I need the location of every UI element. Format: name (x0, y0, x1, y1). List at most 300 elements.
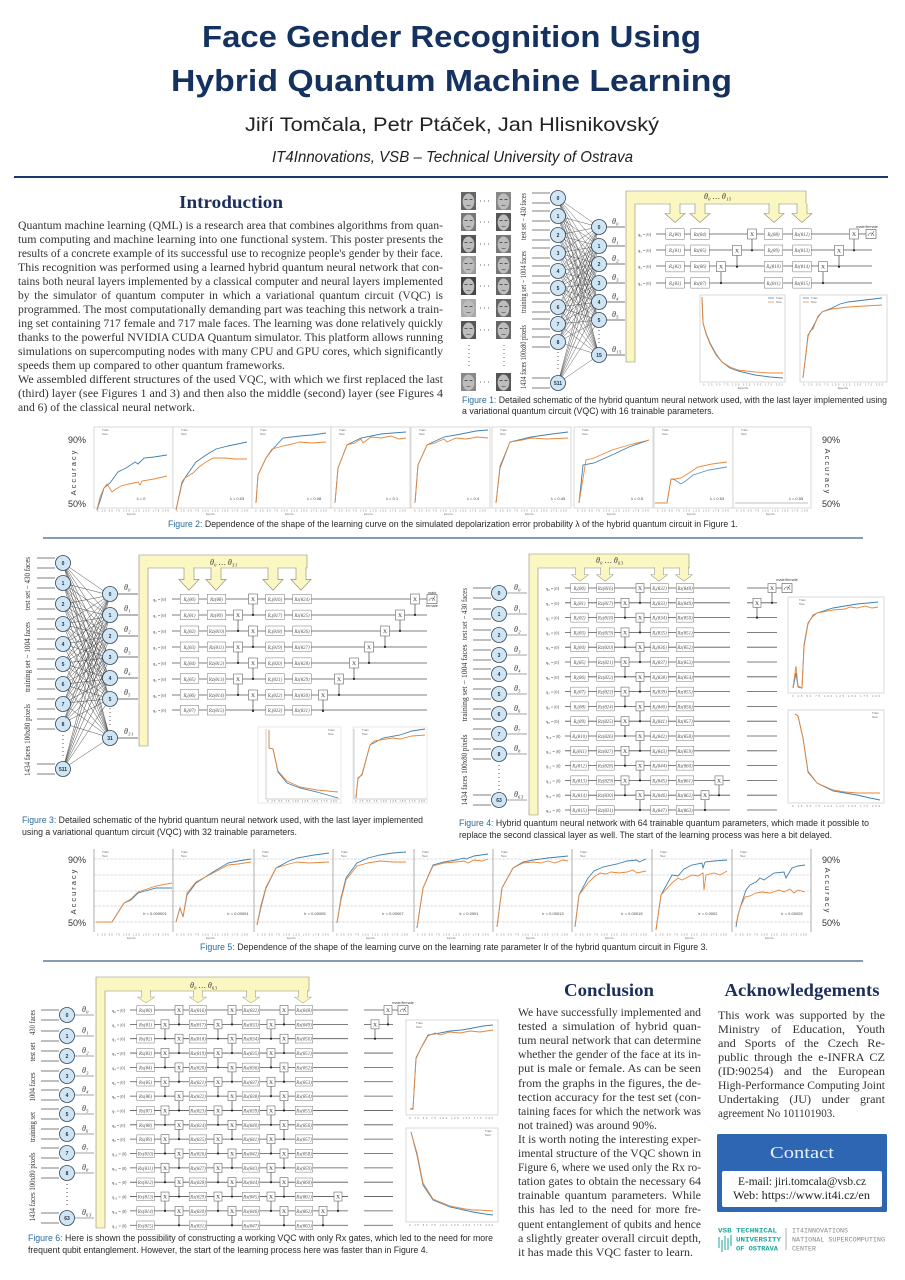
dataset labels: test set − 430 faces (23, 557, 32, 610)
neural layer: θ₄ (82, 1085, 89, 1094)
quantum circuit: Rx(θ5) (138, 1081, 152, 1086)
dataset labels: 1434 faces 100x80 pixels (519, 325, 528, 389)
quantum circuit: Rx(θ43) (242, 1167, 259, 1172)
neural network: 3 (109, 655, 112, 661)
quantum circuit: Rx(θ1) (138, 1023, 152, 1028)
logo: VSB (718, 1228, 782, 1254)
quantum circuit: Rz(θ50) (676, 617, 693, 622)
quantum circuit: Rᵧ(θ34) (651, 617, 667, 622)
quantum circuit: Rz(θ6) (693, 265, 707, 270)
neural network: θ₁ (612, 236, 619, 245)
quantum circuit: Rx(θ49) (295, 1023, 312, 1028)
quantum circuit: Rᵧ(θ6) (182, 694, 196, 699)
text block: conclusion: from the graphs in the figures, the de- (518, 1076, 701, 1090)
chart: lambda 0.08: Train (260, 428, 267, 432)
chart: lr 0.00001: 0 25 50 75 100 125 150 175 200 (176, 932, 249, 936)
chart: lambda 0.55 (733, 427, 811, 516)
panel: introduction (18, 192, 444, 414)
quantum circuit: q₁₂ = |0⟩ (546, 764, 561, 769)
quantum circuit: Rz(θ30) (597, 794, 613, 799)
chart: lambda 0: Train (102, 428, 109, 432)
heading: acknowledgements: Acknowledgements (724, 980, 880, 1000)
quantum circuit: Rz(θ25) (597, 720, 613, 725)
quantum circuit: Rx(θ29) (189, 1196, 206, 1201)
quantum circuit: XXXXXXXXXXXXXXXXXXXXX (163, 1022, 273, 1201)
authors: Jiří Tomčala, Petr Ptáček, Jan Hlisnikovský (245, 114, 659, 136)
neural layer: θ₅ (514, 684, 521, 693)
quantum circuit: Rx(θ25) (189, 1138, 206, 1143)
quantum circuit: Rx(θ12) (137, 1181, 154, 1186)
affiliation: IT4Innovations, VSB – Technical University of Ostrava (272, 149, 633, 166)
text block: acknowledgements: (ID:90254) and the European (718, 1064, 885, 1078)
quantum circuit: Rx(θ9) (138, 1138, 152, 1143)
neural layer: 7 (66, 1151, 69, 1157)
neural network: θ₂ (124, 625, 131, 634)
chart: lambda 0: 0 25 50 75 100 125 150 175 200 (97, 508, 170, 512)
quantum circuit: Rx(θ24) (189, 1124, 206, 1129)
quantum circuit: q₇ = |0⟩ (546, 690, 559, 695)
chart: lambda 0.08: Epochs (285, 512, 294, 516)
neural layer: θ₈ (514, 744, 521, 753)
quantum circuit: q₁₅ = |0⟩ (546, 808, 561, 813)
quantum circuit: Rx(θ47) (242, 1224, 259, 1229)
axis labels left (68, 855, 86, 928)
text block: conclusion: tested a simulation of hybrid quan- (518, 1019, 701, 1033)
neural network: 5 (557, 286, 560, 292)
chart: lambda 0.5: Epochs (607, 512, 616, 516)
quantum circuit: Rᵧ(θ4) (572, 646, 586, 651)
quantum circuit: Rᵧ(θ45) (651, 779, 667, 784)
quantum circuit: Rᵧ(θ22) (267, 694, 283, 699)
quantum circuit: Rz(θ14) (793, 265, 810, 270)
quantum circuit: q₈ = |0⟩ (112, 1123, 125, 1128)
text block: acknowledgements: public through the e-INFRA CZ (718, 1050, 885, 1064)
quantum circuit: Rz(θ54) (676, 676, 693, 681)
chart: lr 0.0002: Test (660, 854, 666, 858)
text block: conclusion: a slightly greater overall circuit depth, (518, 1231, 701, 1245)
quantum circuit: q₃ = |0⟩ (153, 645, 166, 650)
neural layer: 6 (498, 712, 501, 718)
chart: lr 0.00007: lr = 0.00007 (382, 911, 404, 916)
neural network: θ₂ (612, 254, 619, 263)
neural layer: θ₅ (82, 1104, 89, 1113)
neural layer: 5 (498, 692, 501, 698)
quantum circuit: Rz(θ15) (208, 709, 224, 714)
chart: lr 0.00015: Train (580, 850, 587, 854)
quantum circuit: male (428, 590, 437, 595)
quantum circuit: Rz(θ20) (597, 646, 613, 651)
quantum circuit: Rz(θ49) (676, 602, 693, 607)
quantum circuit: Rᵧ(θ23) (267, 709, 283, 714)
neural layer: 8 (66, 1171, 69, 1177)
title: Hybrid Quantum Machine Learning (171, 63, 732, 98)
text block: introduction: Quantum machine learning (QML) is a research area that combines algorithms from quan- (18, 218, 443, 232)
chart: lr 0.00025: lr = 0.00025 (781, 911, 803, 916)
quantum circuit: Rᵧ(θ41) (651, 720, 667, 725)
text block: conclusion: quent entanglement of qubits and hence (518, 1217, 701, 1231)
quantum circuit: Rᵧ(θ42) (651, 735, 667, 740)
quantum circuit: q₁₁ = |0⟩ (112, 1166, 127, 1171)
quantum circuit: Rᵧ(θ10) (571, 735, 587, 740)
quantum circuit: Rᵧ(θ19) (267, 646, 283, 651)
neural network: 4 (109, 676, 112, 682)
axis labels right: 90% (822, 435, 840, 445)
quantum circuit: Rᵧ(θ38) (651, 676, 667, 681)
quantum circuit: Rᵧ(θ7) (182, 709, 196, 714)
neural layer: θ₃ (82, 1066, 89, 1075)
text block: acknowledgements: Undertaking (JU) under grant (718, 1092, 886, 1106)
chart: lambda 0.55: Epochs (766, 512, 775, 516)
quantum circuit: Rx(θ63) (295, 1224, 312, 1229)
neural network: 6 (62, 682, 65, 688)
quantum circuit: Rx(θ51) (295, 1052, 312, 1057)
chart: lambda 0.1: Test (339, 432, 345, 436)
quantum circuit: Rᵧ(θ1) (572, 602, 586, 607)
text block: conclusion: We have successfully implemented and (518, 1005, 701, 1019)
chart: lr 0.00007 (336, 850, 409, 940)
quantum circuit: Rᵧ(θ11) (571, 750, 587, 755)
chart: lr 0.00001: Train (181, 850, 188, 854)
chart: lambda 0.55: Test (741, 432, 747, 436)
quantum circuit: XXXX (321, 1008, 390, 1215)
dataset labels: test set − 430 faces (519, 193, 528, 240)
chart: lambda 0.1: 0 25 50 75 100 125 150 175 200 (334, 508, 407, 512)
quantum circuit: Rz(θ11) (208, 646, 224, 651)
chart: accuracy curve figure 6 (406, 1020, 498, 1120)
quantum circuit: Rz(θ21) (597, 661, 613, 666)
quantum circuit: Rz(θ26) (293, 630, 310, 635)
quantum circuit: Rz(θ7) (693, 282, 707, 287)
neural layer: 4 (66, 1093, 69, 1099)
dataset labels: training set − 1004 faces (23, 622, 32, 692)
neural network: 1 (598, 244, 601, 250)
caption: figure 3 (22, 815, 423, 838)
quantum circuit: q₁₀ = |0⟩ (546, 734, 561, 739)
quantum circuit: Rx(θ0) (138, 1009, 152, 1014)
caption: figure 1 (462, 395, 887, 417)
neural network: 511 (59, 767, 67, 773)
chart: cost curve figure 1: Epochs (738, 386, 749, 390)
chart: lr 0.00005: Epochs (287, 936, 296, 940)
text block: introduction: This recognition was performed using a learned hybrid quantum neural network that con- (18, 260, 443, 274)
chart: lr 0.00007: Test (341, 854, 347, 858)
chart: lr 0.00005: lr = 0.00005 (304, 911, 326, 916)
chart: lr 0.00005 (257, 850, 330, 940)
quantum circuit: Rᵧ(θ5) (572, 661, 586, 666)
quantum circuit: q₁₃ = |0⟩ (112, 1195, 127, 1200)
chart: cost curve figure 6 (406, 1128, 498, 1227)
quantum circuit: Rᵧ(θ21) (267, 678, 283, 683)
neural network: 511 (554, 381, 562, 387)
quantum circuit: Rz(θ23) (597, 691, 613, 696)
caption: figure 3: Figure 3: Detailed schematic of the hybrid quantum neural network used, with the last layer implemented (22, 815, 423, 826)
quantum circuit: Rᵧ(θ36) (651, 646, 667, 651)
quantum circuit: q₄ = |0⟩ (546, 645, 559, 650)
chart: cost curve figure 3: 0 25 50 75 100 125 150 175 200 (267, 799, 338, 803)
chart: cost curve figure 4: 0 25 50 75 100 125 150 175 200 (792, 804, 881, 808)
neural layer: θ₁ (82, 1026, 89, 1035)
quantum circuit: Rᵧ(θ1) (668, 249, 681, 254)
chart: accuracy curve figure 1: 0 25 50 75 100 125 150 175 200 (803, 382, 884, 386)
logo: VSB: OF OSTRAVA (736, 1246, 779, 1254)
quantum circuit: q₁₃ = |0⟩ (546, 778, 561, 783)
logo: IT4Innovations: IT4INNOVATIONS (792, 1228, 848, 1234)
quantum circuit: Rz(θ62) (676, 794, 693, 799)
chart: lr 0.0002: 0 25 50 75 100 125 150 175 200 (655, 932, 728, 936)
chart: lambda 0.4 (411, 427, 490, 516)
quantum circuit: Rᵧ(θ7) (572, 691, 586, 696)
title: Face Gender Recognition Using (202, 19, 701, 54)
quantum circuit: Rx(θ50) (295, 1038, 312, 1043)
chart: lambda 0.03: 0 25 50 75 100 125 150 175 200 (176, 508, 249, 512)
chart: lr 0.0002: Epochs (685, 936, 694, 940)
chart: lr 0.00013: lr = 0.00013 (542, 911, 564, 916)
chart: lr 0.00005: Test (262, 854, 268, 858)
neural network: θ₀ (612, 217, 619, 226)
chart: lr 0.00015: 0 25 50 75 100 125 150 175 200 (575, 932, 648, 936)
panel: figure 6 (28, 977, 498, 1256)
axis labels left: Accuracy (69, 868, 78, 914)
neural network: θ₃ (124, 646, 131, 655)
chart: lambda 0.1 (331, 427, 410, 516)
caption: figure 1: a variational quantum circuit (VQC) with 16 trainable parameters. (462, 406, 714, 417)
neural layer: θ₇ (82, 1143, 89, 1152)
neural network: 15 (596, 353, 602, 359)
quantum circuit: Rx(θ44) (242, 1181, 259, 1186)
text block: conclusion: Figure 6, where we used only the Rx ro- (518, 1160, 701, 1174)
dataset labels: 1434 faces 100x80 pixels (28, 1152, 37, 1222)
quantum circuit: Rz(θ59) (676, 750, 693, 755)
quantum circuit: male/female (392, 1000, 415, 1005)
face samples (461, 192, 511, 391)
dataset labels: 1434 faces 100x80 pixels (23, 704, 32, 776)
quantum circuit: q₆ = |0⟩ (153, 693, 166, 698)
text block: introduction: programmed. The most computationally demanding part was teaching this network a train- (18, 302, 443, 316)
axis labels left: 50% (68, 499, 86, 509)
contact details: E-mail: jiri.tomcala@vsb.cz (738, 1176, 866, 1188)
quantum circuit: Rx(θ30) (189, 1210, 206, 1215)
quantum circuit: Rx(θ46) (242, 1210, 259, 1215)
chart: lr 0.00001: lr = 0.00001 (227, 911, 249, 916)
quantum circuit: Rz(θ13) (793, 249, 810, 254)
dataset labels: training set − 1004 faces (519, 251, 528, 313)
panel: contact (717, 1134, 887, 1212)
axis labels right: 50% (822, 499, 840, 509)
chart: lambda 0.08: Test (260, 432, 266, 436)
neural network: 0 (557, 196, 560, 202)
chart: lr 0.00025: 0 25 50 75 100 125 150 175 200 (735, 932, 808, 936)
text block: acknowledgements: and Sports of the Czech Re- (718, 1036, 885, 1050)
neural network: 8 (557, 340, 560, 346)
neural network: 0 (109, 592, 112, 598)
quantum circuit: q₄ = |0⟩ (112, 1065, 125, 1070)
quantum circuit: Rᵧ(θ3) (668, 282, 681, 287)
chart: accuracy curve figure 4: Test (799, 602, 805, 606)
quantum circuit: Rx(θ40) (242, 1124, 259, 1129)
quantum circuit: Rz(θ61) (676, 779, 693, 784)
quantum circuit: Rᵧ(θ37) (651, 661, 667, 666)
neural network: 4 (598, 300, 601, 306)
quantum circuit: Rx(θ52) (295, 1066, 312, 1071)
neural network: 8 (62, 722, 65, 728)
quantum circuit: q₉ = |0⟩ (546, 719, 559, 724)
neural layer: θ₆ (514, 704, 521, 713)
chart: lr 0.00001: Test (181, 854, 187, 858)
chart: lr 0.00025: Test (740, 854, 746, 858)
chart: lambda 0.5 (574, 427, 653, 516)
chart: cost curve figure 6: 0 25 50 75 100 125 150 175 200 (409, 1223, 494, 1227)
quantum circuit: Rx(θ2) (138, 1038, 152, 1043)
quantum circuit: Rz(θ15) (793, 282, 810, 287)
chart: lambda 0.03: Train (181, 428, 188, 432)
chart: lr 0.000001: lr = 0.000001 (143, 911, 168, 916)
quantum circuit: Rx(θ57) (295, 1138, 312, 1143)
chart: lambda 0.03 (173, 427, 252, 516)
parameter feed band: θ₀ … θ₆₃ (190, 981, 218, 990)
neural layer: 0 (66, 1013, 69, 1019)
chart: lambda 0.08: λ = 0.08 (307, 496, 322, 501)
chart: lambda 0.53 (654, 427, 733, 516)
quantum circuit: Rx(θ55) (295, 1109, 312, 1114)
parameter feed band (96, 977, 312, 1228)
quantum circuit: Rz(θ63) (676, 809, 693, 814)
quantum circuit: Rᵧ(θ8) (766, 233, 780, 238)
text block: introduction: by the simulator of quantum computer in which a variational quantum circuit (VQC) is (18, 288, 443, 302)
quantum circuit: Rᵧ(θ47) (651, 809, 667, 814)
chart: lambda 0.53: Train (662, 428, 669, 432)
quantum circuit: Rᵧ(θ16) (267, 598, 283, 603)
dataset labels: training set − 1004 faces (460, 644, 469, 722)
text block: acknowledgements: Ministry of Education, Youth (718, 1022, 885, 1036)
quantum circuit: Rz(θ8) (209, 598, 223, 603)
neural layer: 5 (66, 1112, 69, 1118)
quantum circuit: Rᵧ(θ20) (267, 662, 283, 667)
axis labels right: 90% (822, 855, 840, 865)
parameter feed band (626, 191, 812, 362)
chart: lr 0.00013: Train (501, 850, 508, 854)
quantum circuit: Rx(θ11) (137, 1167, 153, 1172)
quantum circuit: Rz(θ22) (597, 676, 613, 681)
chart: lambda 0.1: λ = 0.1 (386, 496, 399, 501)
quantum circuit: Rx(θ61) (295, 1196, 312, 1201)
neural layer: 3 (66, 1074, 69, 1080)
parameter feed band: θ₀ … θ₁₅ (704, 192, 732, 201)
chart: lr 0.0001: lr = 0.0001 (459, 911, 479, 916)
caption: figure 2: Figure 2: Dependence of the shape of the learning curve on the simulated depolarization error probability λ of the hybrid quantum circuit in Figure 1. (168, 519, 738, 530)
text block: introduction (18, 218, 444, 414)
neural layer: 3 (498, 653, 501, 659)
quantum circuit: q₅ = |0⟩ (112, 1080, 125, 1085)
dataset labels (519, 193, 528, 389)
chart: accuracy curve figure 3: 0 25 50 75 100 125 150 175 200 (355, 799, 426, 803)
chart: cost curve figure 6: Test (485, 1133, 491, 1137)
quantum circuit: Rz(θ53) (676, 661, 693, 666)
chart: cost curve figure 4 (788, 710, 884, 808)
quantum circuit: Rz(θ48) (676, 587, 693, 592)
chart: lr 0.00005: 0 25 50 75 100 125 150 175 200 (257, 932, 330, 936)
logos (718, 1228, 885, 1254)
quantum circuit: Rᵧ(θ3) (182, 646, 196, 651)
text block: introduction: ing set containing 717 female and 717 male faces. The learning was done relatively quickly (18, 316, 443, 330)
quantum circuit: Rz(θ27) (293, 646, 310, 651)
neural layer: θ₄ (514, 664, 521, 673)
quantum circuit: q₇ = |0⟩ (153, 708, 166, 713)
quantum circuit: Rᵧ(θ0) (668, 233, 681, 238)
chart: cost curve figure 3: Test (328, 732, 334, 736)
chart: cost curve figure 1 (700, 295, 785, 390)
chart: lr 0.00015 (575, 850, 648, 940)
quantum circuit: Rx(θ60) (295, 1181, 312, 1186)
quantum circuit: q₀ = |0⟩ (153, 597, 166, 602)
parameter feed band: θ₀ … θ₆₃ (596, 556, 624, 565)
quantum circuit: q₁₄ = |0⟩ (112, 1209, 127, 1214)
quantum circuit: Rz(θ19) (597, 631, 613, 636)
quantum circuit: Rx(θ62) (295, 1210, 312, 1215)
chart: lr 0.00025: Train (740, 850, 747, 854)
quantum circuit: Rz(θ31) (293, 709, 310, 714)
quantum circuit: Rz(θ58) (676, 735, 693, 740)
text block: conclusion: It is worth noting the interesting exper- (518, 1132, 701, 1146)
quantum circuit: q₉ = |0⟩ (112, 1137, 125, 1142)
neural network: θ₅ (124, 688, 131, 697)
chart: lr 0.0001: 0 25 50 75 100 125 150 175 200 (417, 932, 490, 936)
chart: cost curve figure 1: 0 25 50 75 100 125 150 175 200 (703, 382, 784, 386)
quantum circuit: Rx(θ6) (138, 1095, 152, 1100)
dataset labels: 1434 faces 100x80 pixels (460, 734, 469, 806)
neural network: 4 (557, 269, 560, 275)
quantum circuit: q₅ = |0⟩ (153, 677, 166, 682)
quantum circuit: Rᵧ(θ0) (572, 587, 586, 592)
quantum circuit: q₇ = |0⟩ (112, 1108, 125, 1113)
neural network: 3 (557, 251, 560, 257)
chart: lr 0.00015: lr = 0.00015 (621, 911, 643, 916)
quantum circuit: q₃ = |0⟩ (112, 1051, 125, 1056)
neural network: 1 (109, 613, 112, 619)
chart: accuracy curve figure 3 (353, 727, 427, 803)
neural network: 0 (598, 225, 601, 231)
quantum circuit: Rz(θ55) (676, 691, 693, 696)
quantum circuit: female (426, 603, 439, 608)
quantum circuit: Rx(θ3) (138, 1052, 152, 1057)
quantum circuit: q₃ = |0⟩ (546, 630, 559, 635)
axis labels right: Accuracy (823, 868, 832, 914)
quantum circuit: Rᵧ(θ3) (572, 631, 586, 636)
quantum circuit: q₁ = |0⟩ (546, 601, 559, 606)
chart: lambda 0: Test (102, 432, 108, 436)
heading: conclusion: Conclusion (564, 980, 654, 1000)
quantum circuit: Rᵧ(θ40) (651, 705, 667, 710)
neural layer: 2 (498, 633, 501, 639)
chart: lr 0.00013: 0 25 50 75 100 125 150 175 200 (496, 932, 569, 936)
caption: figure 5: Figure 5: Dependence of the shape of the learning curve on the learning rate parameter lr of the hybrid quantum circuit in Figure 3. (200, 942, 708, 953)
neural network: θ₄ (124, 667, 131, 676)
neural network: 2 (62, 602, 65, 608)
chart: lambda 0.55: λ = 0.55 (789, 496, 804, 501)
text block: conclusion: not trained) was around 90%. (518, 1118, 657, 1132)
quantum circuit: Rᵧ(θ44) (651, 765, 667, 770)
axis labels right: 50% (822, 918, 840, 928)
axis labels right: Accuracy (823, 449, 832, 495)
chart: cost curve figure 4: Test (872, 715, 878, 719)
quantum circuit: Rᵧ(θ1) (182, 614, 196, 619)
chart: cost curve figure 1: Train (776, 296, 783, 300)
quantum circuit: Rx(θ41) (242, 1138, 259, 1143)
axis labels left: 90% (68, 855, 86, 865)
quantum circuit: Rx(θ56) (295, 1124, 312, 1129)
quantum circuit: Rx(θ35) (242, 1052, 259, 1057)
quantum circuit: Rᵧ(θ32) (651, 587, 667, 592)
chart: lambda 0.03: Test (181, 432, 187, 436)
